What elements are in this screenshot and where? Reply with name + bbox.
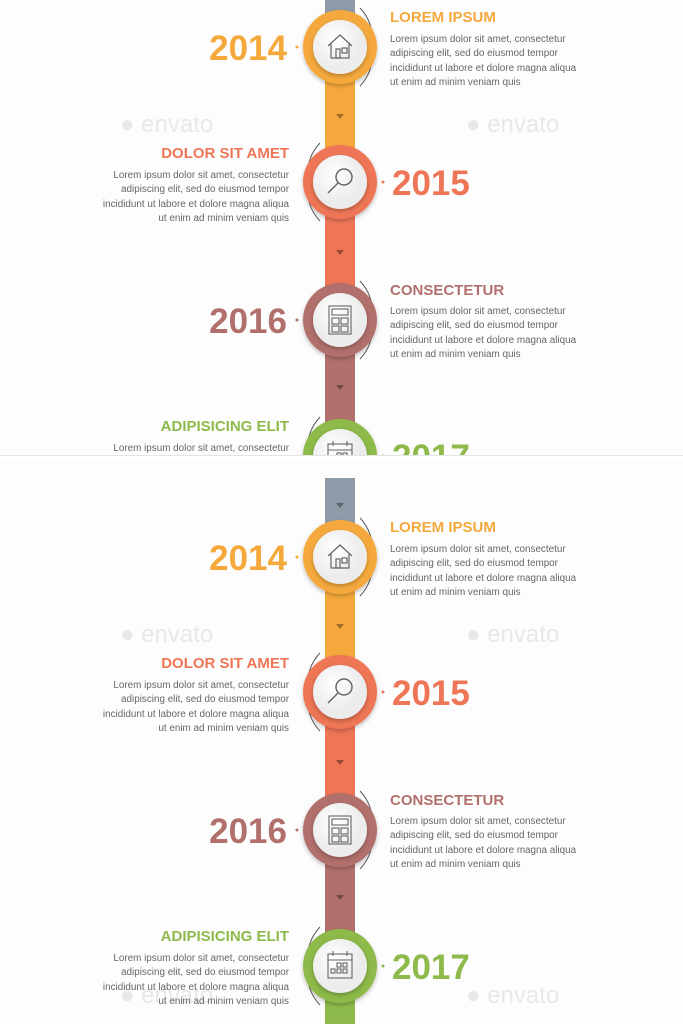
watermarks: ● envato	[466, 982, 559, 1009]
step 2014: LOREM IPSUM	[390, 9, 496, 26]
step 2014	[209, 518, 577, 598]
step 2014: incididunt ut labore et dolore magna aliqua	[390, 63, 577, 74]
step 2015: Lorem ipsum dolor sit amet, consectetur	[113, 680, 290, 691]
panel: bottom timeline copy	[0, 460, 683, 1024]
step 2017: ADIPISICING ELIT	[161, 418, 289, 435]
step 2014: adipiscing elit, sed do eiusmod tempor	[390, 558, 559, 569]
step 2016: adipiscing elit, sed do eiusmod tempor	[390, 320, 559, 331]
step 2017: ADIPISICING ELIT	[161, 928, 289, 945]
step 2015: incididunt ut labore et dolore magna aliqua	[103, 709, 290, 720]
step 2015: DOLOR SIT AMET	[161, 655, 289, 672]
step 2014: LOREM IPSUM	[390, 519, 496, 536]
step 2017	[103, 927, 470, 1007]
step 2017: 2017	[392, 948, 470, 987]
step 2014: 2014	[209, 29, 288, 68]
step 2017: Lorem ipsum dolor sit amet, consectetur	[113, 953, 290, 964]
step 2016: 2016	[209, 302, 287, 341]
step 2016	[209, 281, 577, 360]
step 2014: ut enim ad minim veniam quis	[390, 587, 521, 598]
step 2017: adipiscing elit, sed do eiusmod tempor	[121, 967, 290, 978]
step 2015: 2015	[392, 674, 470, 713]
step 2016: adipiscing elit, sed do eiusmod tempor	[390, 830, 559, 841]
timeline bar	[325, 478, 355, 1024]
step 2016: Lorem ipsum dolor sit amet, consectetur	[390, 816, 566, 827]
step 2014: incididunt ut labore et dolore magna aliqua	[390, 573, 577, 584]
step 2014: Lorem ipsum dolor sit amet, consectetur	[390, 34, 566, 45]
step 2014: 2014	[209, 539, 288, 578]
watermarks: ● envato	[120, 621, 213, 648]
watermarks: ● envato	[466, 621, 559, 648]
step 2014	[209, 8, 577, 88]
step 2016: 2016	[209, 812, 287, 851]
timeline bar	[325, 0, 355, 518]
step 2014: Lorem ipsum dolor sit amet, consectetur	[390, 544, 566, 555]
step 2016: incididunt ut labore et dolore magna aliqua	[390, 845, 577, 856]
step 2017: incididunt ut labore et dolore magna aliqua	[103, 982, 290, 993]
step 2016: CONSECTETUR	[390, 792, 504, 809]
watermarks	[120, 111, 559, 138]
step 2015: Lorem ipsum dolor sit amet, consectetur	[113, 170, 290, 181]
step 2015: adipiscing elit, sed do eiusmod tempor	[121, 694, 290, 705]
step 2015: ut enim ad minim veniam quis	[158, 723, 289, 734]
step 2016: ut enim ad minim veniam quis	[390, 859, 521, 870]
step 2017: Lorem ipsum dolor sit amet, consectetur	[113, 443, 290, 454]
step 2015: 2015	[392, 164, 470, 203]
step 2016: ut enim ad minim veniam quis	[390, 349, 521, 360]
step 2014: ut enim ad minim veniam quis	[390, 77, 521, 88]
step 2015: ut enim ad minim veniam quis	[158, 213, 289, 224]
step 2015	[103, 143, 470, 224]
step 2014: adipiscing elit, sed do eiusmod tempor	[390, 48, 559, 59]
watermarks: ● envato	[120, 982, 213, 1009]
panel: top timeline copy	[0, 0, 683, 456]
step 2016: Lorem ipsum dolor sit amet, consectetur	[390, 306, 566, 317]
step 2016: CONSECTETUR	[390, 282, 504, 299]
step 2016: incididunt ut labore et dolore magna aliqua	[390, 335, 577, 346]
step 2016	[209, 791, 577, 870]
watermarks: ● envato	[466, 111, 559, 138]
watermarks: ● envato	[120, 111, 213, 138]
step 2015: incididunt ut labore et dolore magna aliqua	[103, 199, 290, 210]
step 2015	[103, 653, 470, 734]
step 2017	[103, 417, 470, 497]
step 2015: adipiscing elit, sed do eiusmod tempor	[121, 184, 290, 195]
step 2017: ut enim ad minim veniam quis	[158, 996, 289, 1007]
watermarks	[120, 621, 559, 1009]
step 2015: DOLOR SIT AMET	[161, 145, 289, 162]
